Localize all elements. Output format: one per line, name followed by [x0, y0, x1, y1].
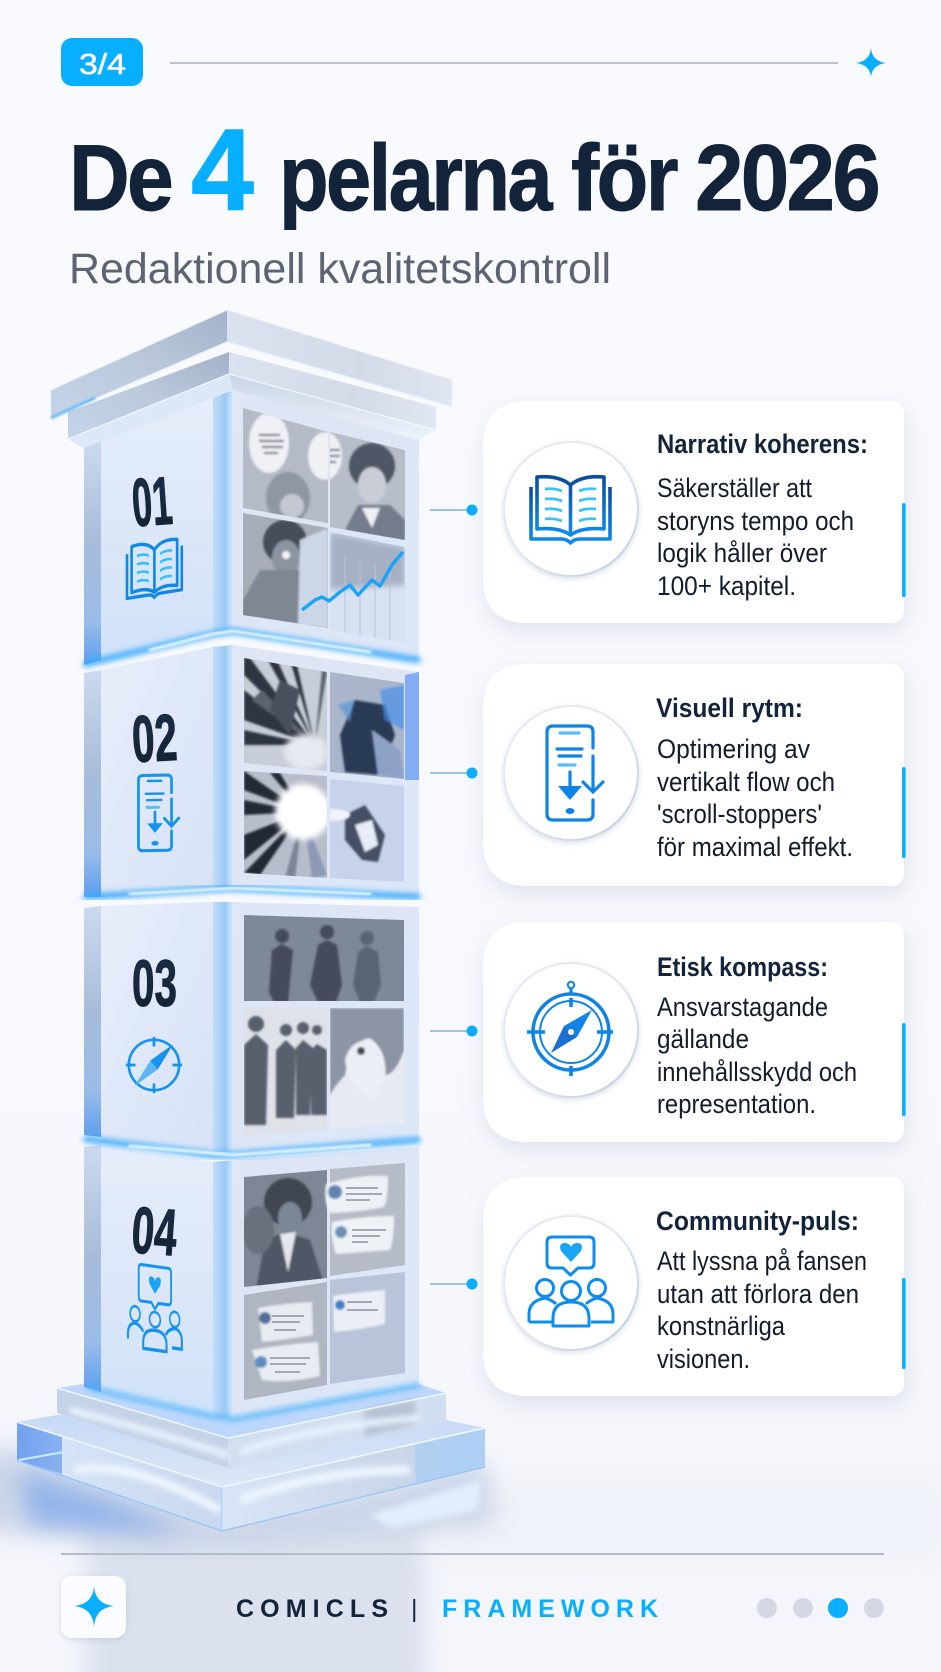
- line chart: [302, 552, 403, 610]
- panel: comic 04: [242, 1163, 405, 1400]
- panel: card 1 Narrativ koherens: [483, 401, 906, 623]
- floor shadow under pillar: [0, 1448, 495, 1545]
- panel: card 4 Community-puls: utan att förlora den: [657, 1279, 859, 1309]
- panel: comic 02: [244, 650, 404, 882]
- title: för: [571, 125, 678, 230]
- page badge: [61, 38, 143, 86]
- icon: book small: [127, 538, 182, 602]
- icon: compass: [527, 982, 613, 1076]
- footer brand text: COMICLS: [236, 1595, 388, 1623]
- block 02: [84, 645, 419, 897]
- connector 1: [430, 504, 478, 516]
- footer brand text: FRAMEWORK: [442, 1595, 658, 1623]
- panel: card 4 Community-puls: Community-puls:: [656, 1206, 859, 1236]
- panel: card 1 Narrativ koherens: 100+ kapitel.: [657, 571, 796, 601]
- panel: card 2 Visuell rytm: för maximal effekt.: [657, 832, 853, 862]
- panel: card 2 Visuell rytm: Optimering av: [657, 734, 810, 764]
- pillar capital: [51, 310, 452, 448]
- panel: card 3 Etisk kompass: innehållsskydd och: [657, 1057, 857, 1087]
- icon: community bubble and people: [128, 1263, 182, 1354]
- panel: card 1 Narrativ koherens: Säkerställer att: [657, 473, 812, 503]
- icon: phone small: [138, 775, 179, 851]
- title: pelarna: [279, 125, 553, 230]
- block 04: [84, 1145, 419, 1419]
- connector 2: [430, 768, 478, 778]
- panel: card 2 Visuell rytm: [483, 664, 906, 886]
- footer logo tile: [61, 1576, 126, 1638]
- block 01: [84, 390, 419, 665]
- number 01: 01: [130, 463, 175, 541]
- icon: open book: [531, 477, 610, 543]
- page badge: 3/4: [79, 49, 126, 81]
- icon: community: [529, 1237, 613, 1326]
- icon: sparkle top right: [856, 48, 886, 77]
- panel: card 3 Etisk kompass: Ansvarstagande: [657, 992, 828, 1022]
- panel: card 1 Narrativ koherens: Narrativ koherens:: [657, 429, 868, 459]
- block 03: [84, 902, 419, 1152]
- panel: card 2 Visuell rytm: Visuell rytm:: [656, 693, 803, 723]
- panel: card 3 Etisk kompass: [483, 922, 906, 1142]
- glow seams: [86, 631, 418, 1419]
- pagination dots: [757, 1598, 884, 1618]
- panel: card 1 Narrativ koherens: logik håller över: [657, 538, 827, 568]
- title: [69, 105, 878, 235]
- panel: comic 03: [244, 915, 404, 1136]
- icon: compass small: [126, 1037, 182, 1093]
- pillar base: [17, 1384, 485, 1531]
- footer brand text: |: [411, 1595, 418, 1623]
- panel: comic 01: [243, 408, 405, 643]
- panel: card 2 Visuell rytm: 'scroll-stoppers': [657, 799, 822, 829]
- panel: card 4 Community-puls: visionen.: [657, 1344, 750, 1374]
- panel: card 3 Etisk kompass: representation.: [657, 1089, 816, 1119]
- panel: card 3 Etisk kompass: gällande: [657, 1024, 749, 1054]
- number 03: 03: [132, 946, 177, 1020]
- panel: card 4 Community-puls: konstnärliga: [657, 1311, 786, 1341]
- panel: card 2 Visuell rytm: vertikalt flow och: [657, 767, 835, 797]
- glass pillar: [17, 310, 485, 1531]
- subtitle: Redaktionell kvalitetskontroll: [69, 245, 611, 293]
- icon: phone scroll: [547, 726, 603, 820]
- panel: card 3 Etisk kompass: Etisk kompass:: [657, 952, 828, 982]
- connector 4: [430, 1278, 478, 1290]
- panel: card 4 Community-puls: Att lyssna på fansen: [657, 1246, 867, 1276]
- panel: card 4 Community-puls: [483, 1177, 906, 1396]
- title: 2026: [695, 125, 878, 230]
- footer brand text: [236, 1595, 658, 1623]
- connector 3: [430, 1026, 478, 1036]
- title: De: [69, 125, 172, 230]
- panel: card 1 Narrativ koherens: storyns tempo och: [657, 506, 854, 536]
- title: 4: [191, 105, 254, 235]
- number 04: 04: [129, 1193, 180, 1270]
- number 02: 02: [130, 700, 179, 776]
